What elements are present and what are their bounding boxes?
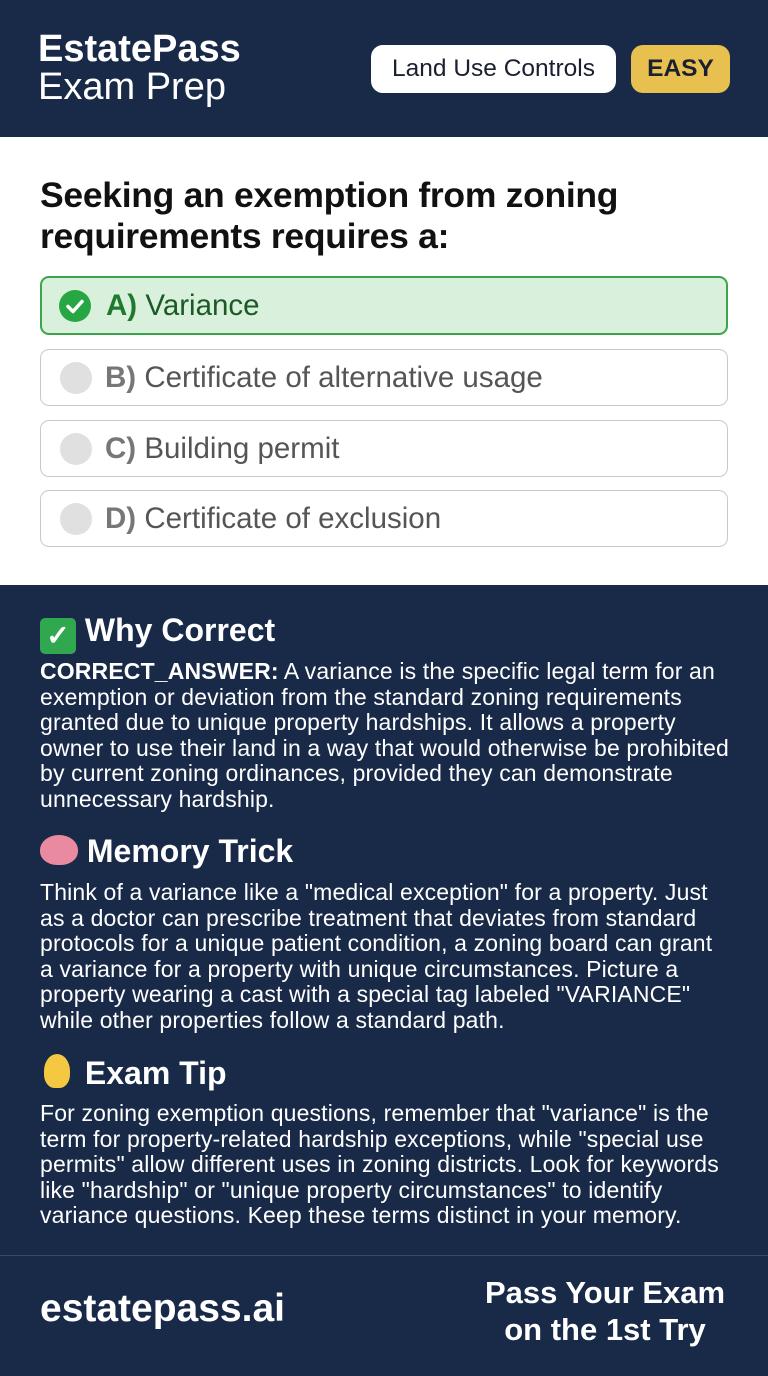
text: memory trick: property wearing a cast with a special tag labeled "VARIANCE" — [40, 981, 690, 1007]
difficulty badge — [631, 45, 730, 93]
text: memory trick: protocols for a unique patient condition, a zoning board can grant — [40, 930, 712, 956]
text: memory trick: as a doctor can prescribe treatment that deviates from standard — [40, 904, 696, 930]
category pill — [371, 45, 616, 93]
text: why correct: owner to use their land in a way that would otherwise be prohibited — [40, 734, 729, 760]
footer tagline: on the 1st Try — [504, 1312, 706, 1347]
text: exam tip: like "hardship" or "unique property circumstances" to identify — [40, 1176, 662, 1202]
option A correct: A) Variance — [106, 288, 260, 322]
footer brand: estatepass.ai — [40, 1287, 285, 1330]
heading: why correct: ✓ — [46, 620, 70, 651]
text: why correct: granted due to unique property hardships. It allows a property — [40, 709, 676, 735]
text: memory trick — [40, 879, 712, 1033]
option C — [40, 420, 728, 477]
text: exam tip: variance questions. Keep these terms distinct in your memory. — [40, 1202, 682, 1228]
footer tagline — [485, 1275, 725, 1347]
text: memory trick: Think of a variance like a "medical exception" for a property. Just — [40, 879, 708, 905]
header bar — [0, 0, 768, 137]
option D: D) Certificate of exclusion — [105, 502, 441, 534]
text: exam tip: permits" allow different uses in zoning districts. Look for keywords — [40, 1151, 719, 1177]
heading: exam tip: Exam Tip — [85, 1055, 227, 1091]
brand logo text: Exam Prep — [38, 66, 226, 108]
text: exam tip — [40, 1100, 719, 1228]
category pill: Land Use Controls — [392, 55, 595, 82]
text: exam tip: For zoning exemption questions, remember that "variance" is the — [40, 1100, 709, 1126]
footer tagline: Pass Your Exam — [485, 1275, 725, 1310]
heading: why correct — [40, 612, 275, 654]
heading: why correct: Why Correct — [85, 612, 275, 648]
heading: memory trick: Memory Trick — [87, 833, 293, 869]
question text: Seeking an exemption from zoning — [40, 175, 618, 215]
text: memory trick: a variance for a property with unique circumstances. Picture a — [40, 956, 678, 982]
text: why correct: CORRECT_ANSWER: A variance is the specific legal term for an — [40, 658, 715, 684]
question panel — [0, 137, 768, 585]
icon: check circle — [59, 290, 91, 322]
text: why correct: by current zoning ordinances, provided they can demonstrate — [40, 760, 673, 786]
text: why correct — [40, 658, 729, 812]
option A correct — [40, 276, 728, 335]
question text: requirements requires a: — [40, 216, 449, 256]
question text — [40, 175, 618, 256]
text: exam tip: term for property-related hardship exceptions, while "special use — [40, 1126, 704, 1152]
option B — [40, 349, 728, 406]
option C: C) Building permit — [105, 432, 339, 464]
brand logo text: EstatePass — [38, 28, 241, 70]
brand logo text — [38, 28, 241, 108]
option D — [40, 490, 728, 547]
text: why correct: unnecessary hardship. — [40, 786, 275, 812]
text: memory trick: while other properties follow a standard path. — [40, 1006, 505, 1032]
difficulty badge: EASY — [647, 55, 714, 82]
text: why correct: exemption or deviation from the standard zoning requirements — [40, 684, 682, 710]
option B: B) Certificate of alternative usage — [105, 360, 543, 394]
